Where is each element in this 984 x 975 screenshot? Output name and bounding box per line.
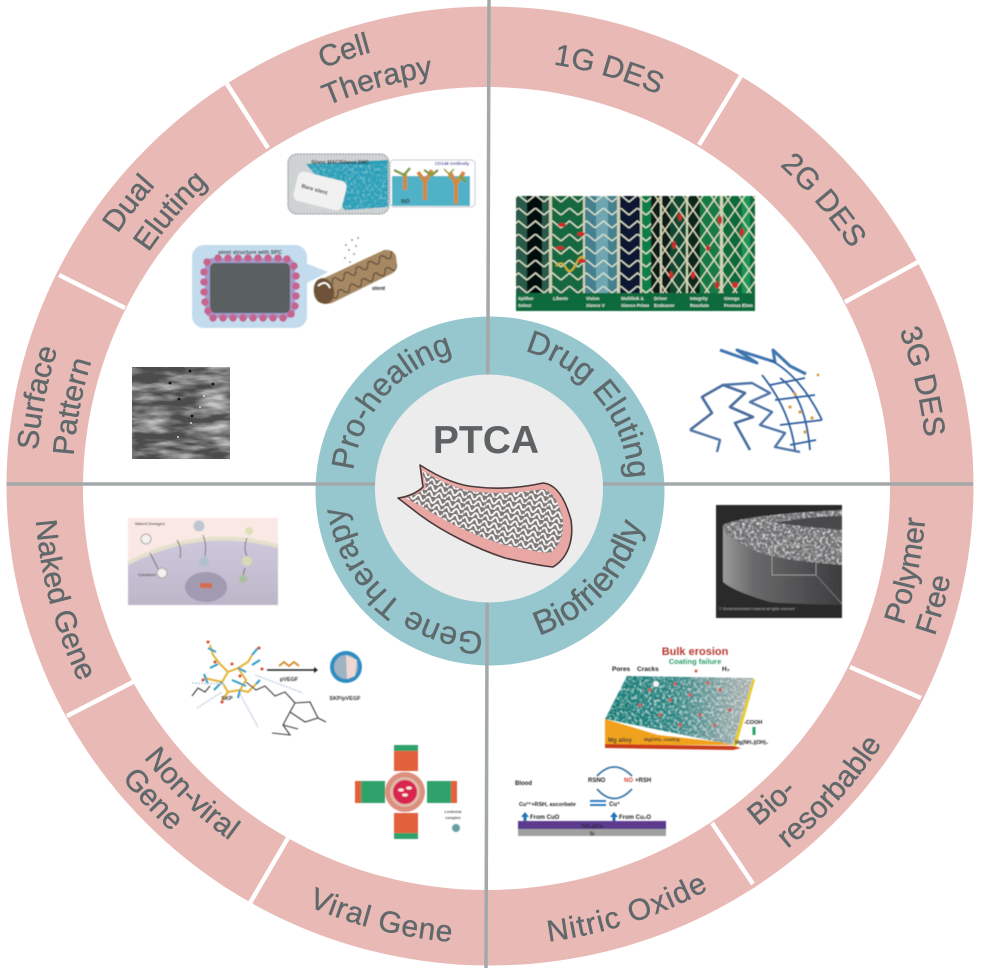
central grey hub (375, 374, 603, 602)
figure: second generation drug eluting stents panel: Resolute (690, 303, 710, 308)
figure: nitric oxide release diagram: Si (590, 832, 595, 838)
segment label: Dual Eluting: Dual (102, 172, 154, 232)
figure: bioresorbable bulk erosion coating: Mg alloy (608, 738, 633, 744)
figure: SKP / pVEGF molecule: SKP (221, 696, 233, 702)
figure: bioresorbable bulk erosion coating: Mg(NH₂)(OH)₂ (735, 740, 768, 746)
figure: bioresorbable bulk erosion coating (605, 646, 768, 750)
figure: nitric oxide release diagram: NO (624, 778, 633, 784)
ring label: Drug Eluting: Drug Eluting (527, 330, 646, 477)
figure: second generation drug eluting stents panel: Xience Prime (621, 303, 650, 308)
figure: nitric oxide release diagram (515, 767, 666, 838)
figure: naked gene cell pathway diagram: Cytoplasm (138, 573, 156, 577)
ring label: Pro-healing: Pro-healing (332, 338, 452, 468)
figure: bioresorbable bulk erosion coating: Mg(OH)₂ coating (644, 737, 680, 742)
figure: nitric oxide release diagram: RSNO (588, 778, 606, 784)
figure: SKP / pVEGF molecule: SKP/pVEGF (329, 696, 361, 702)
figure: nitric oxide release diagram: Cu⁺ (609, 801, 620, 808)
figure: nitric oxide release diagram: +RSH (635, 778, 651, 784)
figure: viral gene cross diagram: complex (445, 816, 462, 820)
segment label: Polymer Free: Polymer (884, 517, 925, 624)
figure: nitric oxide release diagram: From CuO (530, 815, 560, 821)
figure: nitric oxide release diagram: TiO₂@Cu (581, 824, 603, 830)
figure: second generation drug eluting stents panel: Select (518, 303, 532, 308)
figure: second generation drug eluting stents panel: Vision (586, 296, 600, 301)
figure: SKP / pVEGF molecule: pVEGF (280, 677, 299, 683)
segment label: Polymer Free (884, 517, 950, 634)
figure: second generation drug eluting stents panel: Xpither (518, 296, 534, 301)
figure: dual eluting stent structure: stent (372, 286, 385, 292)
segment label: Bio-resorbable: resorbable (778, 738, 880, 848)
figure: cell therapy stent with antibody (288, 154, 475, 214)
segment label: Polymer Free: Free (916, 576, 950, 634)
figure: bioresorbable bulk erosion coating: -COOH (744, 720, 762, 726)
figure: bioresorbable bulk erosion coating: Pores (612, 666, 630, 673)
figure: second generation drug eluting stents panel (516, 196, 755, 311)
figure: cell therapy stent with antibody: Bare stent (301, 183, 328, 197)
figure: viral gene cross diagram: Lentiviral (445, 810, 461, 814)
figure: third generation blue stent (690, 350, 822, 452)
icon: stent in vessel (398, 465, 572, 567)
segment label: Dual Eluting: Eluting (132, 172, 209, 251)
figure: polymer free stent micrograph: © Shutterstock/stent material all rights reserved (719, 607, 795, 611)
segment label: Cell Therapy: Cell (320, 32, 370, 66)
segment label: Naked Gene: Naked Gene (36, 520, 92, 680)
segment label: Cell Therapy: Therapy (320, 60, 430, 103)
figure: dual eluting stent structure: stent structure with SPC (218, 250, 282, 256)
figure: SKP / pVEGF molecule (192, 640, 362, 735)
figure: bioresorbable bulk erosion coating: Bulk erosion (662, 646, 729, 658)
figure: second generation drug eluting stents panel: Endeavor (654, 303, 675, 308)
figure: surface pattern micrograph (132, 367, 230, 459)
figure: second generation drug eluting stents panel: Integrity (690, 296, 708, 301)
figure: dual eluting stent structure (192, 237, 397, 328)
segment label: 3G DES: 3G DES (901, 326, 945, 436)
figure: second generation drug eluting stents panel: Liberte (553, 296, 569, 301)
segment label: Bio-resorbable: Bio- (746, 786, 792, 826)
figure: second generation drug eluting stents panel: Omega (724, 296, 740, 301)
figure: cell therapy stent with antibody: SiO (401, 199, 410, 205)
ring label: Gene Therapy: Gene Therapy (327, 510, 481, 654)
segment label: Nitric Oxide: Nitric Oxide (548, 878, 706, 942)
ring label: Biofriendly: Biofriendly (532, 518, 646, 635)
segment label: Surface Pattern: Surface (18, 347, 56, 449)
segment label: Viral Gene: Viral Gene (316, 886, 452, 942)
figure: cell therapy stent with antibody: Silane MAC/Silanol SMC (311, 160, 369, 166)
figure: naked gene cell pathway diagram: Naked Dosages (135, 521, 166, 526)
title: PTCA: PTCA (433, 419, 539, 462)
segment label: Non-viral Gene: Gene (126, 770, 180, 829)
segment label: Cell Therapy (320, 32, 430, 103)
figure: bioresorbable bulk erosion coating: Cracks (637, 666, 659, 673)
figure: viral gene cross diagram (355, 745, 462, 839)
inner teal ring (316, 316, 664, 666)
segment label: 1G DES: 1G DES (555, 45, 664, 92)
segment label: Surface Pattern: Pattern (52, 359, 91, 454)
segment label: 2G DES: 2G DES (780, 154, 866, 246)
figure: bioresorbable bulk erosion coating: Coating failure (669, 657, 721, 666)
segment label: Bio-resorbable (746, 738, 880, 848)
figure: nitric oxide release diagram: From Cu₂O (619, 815, 651, 821)
figure: second generation drug eluting stents panel: Xience V (586, 303, 605, 308)
figure: cell therapy stent with antibody: CD146 Antibody (435, 161, 470, 166)
figure: second generation drug eluting stents panel: Promus Elem (724, 303, 753, 308)
figure: nitric oxide release diagram: Blood (515, 781, 532, 787)
figure: second generation drug eluting stents panel: Multilink & (621, 296, 644, 301)
segment label: Non-viral Gene: Non-viral (145, 746, 242, 840)
segment label: Dual Eluting (102, 172, 209, 251)
figure: polymer free stent micrograph (716, 505, 842, 618)
figure: bioresorbable bulk erosion coating: H₂ (722, 666, 730, 673)
segment label: Surface Pattern (18, 347, 91, 454)
figure: nitric oxide release diagram: Cu²⁺+RSH, ascorbate (519, 801, 576, 808)
figure: naked gene cell pathway diagram (128, 518, 278, 605)
figure: second generation drug eluting stents panel: Driver (654, 296, 667, 301)
